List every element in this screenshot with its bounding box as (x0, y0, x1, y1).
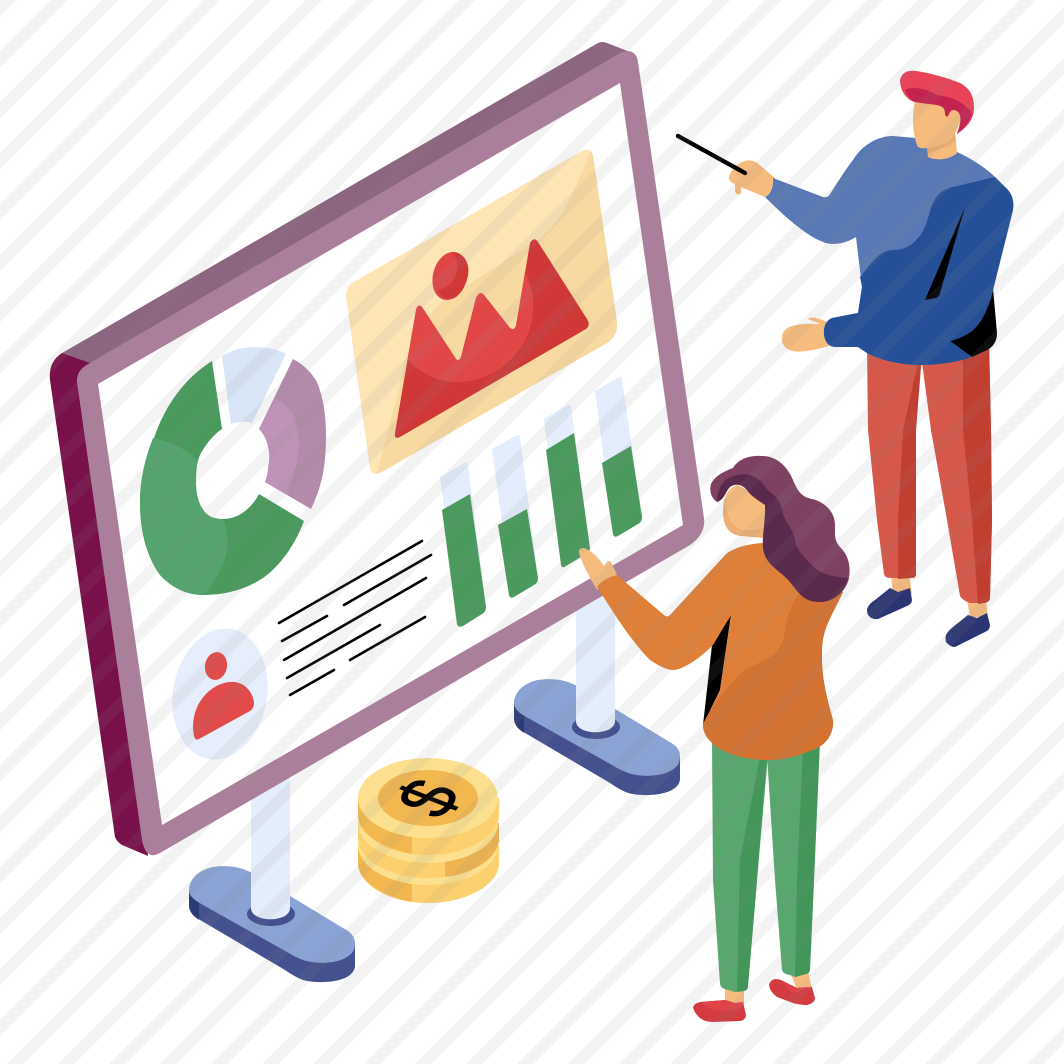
man hair (900, 71, 974, 134)
woman left shoe (693, 1000, 746, 1022)
woman hand (579, 548, 617, 590)
bar 1 value (442, 494, 486, 627)
avatar background (162, 621, 278, 767)
woman sweater shade (703, 592, 843, 760)
user avatar (162, 621, 278, 767)
man neck and face (913, 98, 962, 159)
sun shade (437, 253, 468, 299)
monitor left edge (50, 353, 148, 856)
top coin face (358, 758, 498, 838)
mountain highlight (408, 272, 533, 382)
woman right shoe (769, 979, 815, 1005)
man right shoe (946, 613, 990, 647)
card shade (377, 152, 617, 474)
donut green segment (140, 361, 304, 595)
right stand base side (514, 703, 680, 795)
monitor (50, 42, 704, 856)
monitor top edge (62, 42, 630, 365)
avatar body (193, 682, 254, 740)
left stand ring (247, 902, 295, 926)
donut light blue segment (222, 347, 286, 424)
man pointing hand (729, 160, 775, 197)
woman face (723, 485, 768, 538)
middle coin side (358, 823, 499, 878)
image card (346, 150, 617, 474)
left stand base end shade (189, 890, 199, 920)
monitor screen (98, 83, 683, 825)
woman presenter (579, 456, 850, 1022)
bottom coin top (358, 805, 498, 885)
bar 2 value (498, 509, 538, 598)
bar 1 track (440, 463, 486, 628)
woman ankles (725, 972, 812, 1004)
donut chart (140, 347, 326, 595)
bar chart (440, 377, 642, 628)
bar 3 value (546, 433, 590, 567)
mountain picture (395, 239, 589, 438)
man right leg (921, 340, 992, 603)
woman left leg shade (737, 755, 767, 992)
bottom coin side shade (358, 845, 412, 902)
woman hair (710, 456, 850, 602)
left stand post (251, 760, 290, 919)
left stand base top (189, 866, 355, 963)
bottom coin side (358, 845, 499, 903)
middle coin top (358, 783, 498, 863)
bar 4 track (595, 377, 642, 538)
man presenter (678, 71, 1013, 647)
man sweater fold (925, 207, 965, 300)
top coin side shade (358, 798, 412, 854)
man ankles (891, 575, 988, 617)
woman left leg (712, 740, 768, 992)
donut purple segment (259, 359, 326, 509)
man right leg shade (963, 340, 992, 604)
bar 3 track (544, 405, 590, 568)
woman right shoe highlight (783, 981, 807, 992)
coin stack (358, 758, 499, 903)
woman hair dark (717, 474, 848, 602)
man sweater back black (945, 288, 997, 357)
right stand base top (514, 679, 680, 776)
text lines (279, 541, 431, 695)
coin center (378, 770, 478, 826)
man left leg shade (898, 362, 921, 579)
man open hand (782, 318, 829, 352)
dollar sign: $ (380, 770, 477, 827)
donut purple highlight (259, 398, 299, 495)
right stand ring (572, 715, 620, 739)
man neck shade (927, 133, 956, 153)
woman right leg (767, 740, 820, 977)
donut green highlight (140, 438, 228, 594)
man pointer stick (678, 136, 745, 173)
top coin side (358, 798, 499, 855)
monitor front frame (77, 51, 704, 855)
bar 2 track (492, 435, 538, 598)
woman left shoe highlight (700, 1000, 744, 1011)
avatar head (203, 650, 229, 682)
right monitor stand (514, 590, 680, 795)
right stand base end shade (514, 703, 524, 733)
middle coin side shade (445, 823, 499, 877)
man sweater light (765, 136, 1013, 365)
man hair underside (905, 88, 972, 134)
man sweater dark (824, 177, 1013, 365)
woman right leg shade (795, 740, 820, 977)
woman sweater (597, 543, 843, 760)
man left leg (867, 345, 922, 578)
man left shoe (867, 588, 912, 619)
right stand post (576, 590, 615, 732)
bar 4 value (602, 446, 642, 537)
left stand base side (189, 890, 355, 982)
card background (346, 150, 617, 474)
woman face shade (723, 497, 765, 538)
woman fold black (703, 615, 731, 725)
sun circle (427, 248, 473, 304)
left monitor stand (189, 760, 355, 982)
